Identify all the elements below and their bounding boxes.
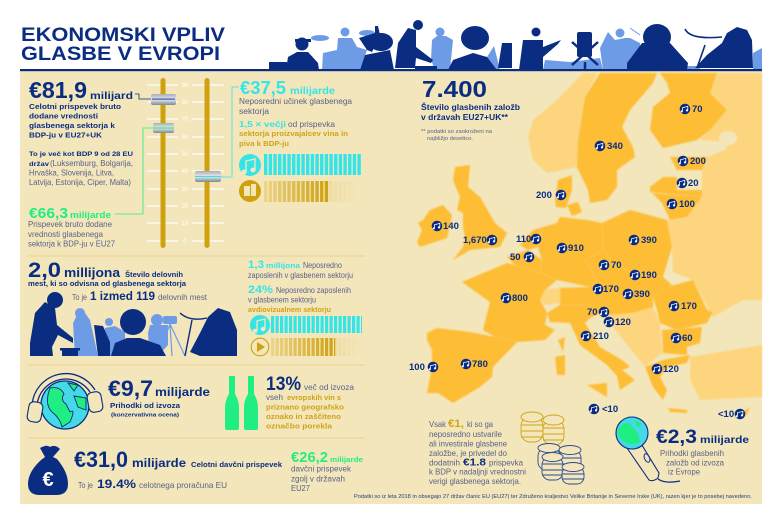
text block: 66,3 billion [28,205,115,248]
text block: 81,9 billion: dodane vrednosti [29,112,98,120]
text block: 31,0 billion tax: 19.4% [97,477,136,491]
panel: GDP sliders: 50 [182,152,189,158]
silhouettes of music workers [30,292,237,356]
text block: 31,0 billion tax: Celotni davčni prispevek [191,460,283,469]
icon: globe with headphones [26,374,104,429]
text block: every euro: neposredno ustvarile [429,430,502,439]
text block: every euro: €1, [448,418,464,430]
text block: 81,9 billion [29,77,133,140]
map markers: 780 [472,359,488,370]
text block: every euro [429,418,526,486]
text block: 2.0 million jobs: 2,0 [28,259,61,282]
text block: 37,5 billion [239,78,353,148]
text block: 7.400 labels: 7.400 [422,76,487,102]
text block: more than GDP of 9 states: Hrvaška, Slovenija, Litva, [29,168,114,178]
icon: microphone globe [616,417,680,482]
text block: every euro: ki so ga [467,420,494,429]
text block: 26,2 billion tax: milijarde [330,455,363,464]
icon: audiovisual play bars [251,338,362,356]
text block: 66,3 billion: vrednosti glasbenega [28,230,104,239]
icon: music bars, direct employment [250,315,362,335]
text block: 81,9 billion: glasbenega sektorja k [29,121,116,130]
map markers [409,104,745,420]
icon: wine and beer bars [239,180,362,202]
text block: 2.0 million jobs: To je [72,293,87,302]
text block: 66,3 billion: sektorja k BDP-ju v EU27 [28,240,115,248]
text block: 81,9 billion: €81,9 [29,77,87,103]
text block: 2,3 billion: Prihodki glasbenih [660,449,724,458]
text block: 1.3 million and 24%: millijona [266,261,301,270]
map markers: 140 [443,221,459,232]
text block: more than GDP of 9 states: (Luksemburg, Bolgarija, [50,159,133,168]
icon: two wine bottles [225,376,258,430]
text block: 9,7 billion exports: (konzervativna ocena) [111,412,179,418]
text block: 37,5 billion: €37,5 [240,78,286,98]
text block: every euro: verigi glasbenega sektorja. [429,477,521,486]
map markers: 800 [512,293,528,304]
text block: 2.0 million jobs: millijona [64,265,121,280]
text block: 2,3 billion: milijarde [700,434,749,446]
text block: 1.3 million and 24% [248,259,353,314]
map markers: 100 [409,362,425,373]
text block: 31,0 billion tax: €31,0 [74,447,128,472]
text block: 13% of wine exports: priznano geografsko [266,404,344,412]
map markers: 110 [516,234,531,245]
panel: GDP sliders: 10 [182,221,189,227]
panel: GDP sliders: 60 [182,135,189,141]
map markers: <10 [718,409,734,420]
text block: 7.400 labels: ** podatki so zaokroženi na [421,129,492,135]
title: GLASBE V EVROPI [21,44,220,65]
text block: 9,7 billion exports [108,376,210,418]
icon: coin stacks [521,412,584,484]
text block: 9,7 billion exports: €9,7 [108,376,153,401]
text block: more than GDP of 9 states: To je več kot BDP 9 od 28 EU [29,151,133,158]
map markers: 120 [663,364,679,375]
text block: 37,5 billion: od prispevka [288,120,336,129]
map markers: 20 [688,178,699,189]
text block: every euro: založbe, je privedel do [429,449,508,458]
text block: 37,5 billion: sektorja [239,107,270,116]
icon: money bag: € [42,469,54,491]
text block: 66,3 billion: €66,3 [29,205,68,222]
map markers: 390 [641,235,657,246]
text block: more than GDP of 9 states: držav [29,161,49,168]
text block: 1.3 million and 24%: Neposredno zaposlenih [276,286,351,295]
text block: 7.400 labels: Število glasbenih založb [421,103,520,112]
text block: every euro: Vsak [429,420,446,429]
text block: 81,9 billion: milijard [90,90,133,102]
map markers: 200 [690,156,706,167]
text block: 26,2 billion tax: EU27 [291,484,310,493]
text block: 2.0 million jobs: mest, ki so odvisna od glasbenega sektorja [28,279,187,288]
icon: music vs music bars [239,154,362,176]
text block: 26,2 billion tax: davčni prispevek [291,464,351,474]
map markers: <10 [602,404,618,415]
map markers: 1,670 [463,235,487,246]
text block: 37,5 billion: sektorja proizvajalcev vina in [239,131,348,138]
text block: 31,0 billion tax: To je [78,481,93,490]
text block: 13% of wine exports: vseh [266,393,283,402]
header rule [20,69,762,71]
text block: 13% of wine exports: 13% [266,374,301,395]
map markers: 210 [593,331,609,342]
map markers: 340 [607,141,623,152]
text block: 66,3 billion: milijarde [70,210,111,220]
text block: 81,9 billion: Celotni prispevek bruto [29,102,121,111]
text block: 13% of wine exports: oznako in zaščiteno [266,414,341,421]
text block: 2.0 million jobs: 1 izmed 119 [90,289,155,303]
text block: 1.3 million and 24%: 1,3 [248,259,264,271]
text block: 26,2 billion tax [291,449,363,493]
panel: map of Europe [417,73,762,416]
map markers: 190 [641,270,657,281]
text block: 26,2 billion tax: €26,2 [291,449,328,466]
title [21,25,225,65]
map markers: 170 [603,284,619,295]
text block: 1.3 million and 24%: zaposlenih v glasbenem sektorju [248,271,353,280]
panel divider lines [28,256,365,438]
text block: 2.0 million jobs [28,259,208,303]
text block: 2,3 billion [656,427,749,476]
text block: 37,5 billion: 1,5 × večji [239,120,286,129]
text block: 1.3 million and 24%: Neposredno [303,261,343,270]
text block: 2.0 million jobs: Število delovnih [125,270,183,279]
text block: 1.3 million and 24%: 24% [248,284,273,296]
panel: GDP sliders: 40 [182,169,189,175]
map markers: 70 [587,307,598,318]
text block: 7.400 labels: v državah EU27+UK** [421,113,509,122]
text block: every euro: €1.8 [463,458,487,468]
text block: 1.3 million and 24%: avdiovizualnem sektorju [248,307,331,314]
text block: 37,5 billion: milijarde [290,86,335,97]
map markers: 60 [682,333,693,344]
panel: GDP sliders: 0 [183,239,187,245]
text block: every euro: dodatnih [429,458,460,468]
panel: GDP sliders: 20 [182,204,189,210]
map markers: 170 [681,301,697,312]
text block: 66,3 billion: Prispevek bruto dodane [28,220,112,229]
map markers: 200 [536,190,552,201]
text block: 26,2 billion tax: zgolj v državah [291,474,345,484]
map markers: 70 [692,104,703,115]
text block: more than GDP of 9 states [29,151,133,187]
text block: 13% of wine exports: evropskih vin s [287,395,341,402]
footer note: Podatki so iz leta 2018 in obsegajo 27 držav članic EU (EU27) ter Združeno kraljestvo Velike Britanije in Severne Irske (UK), razen kjer je to posebej navedeno. [354,494,752,500]
text block: more than GDP of 9 states: Latvija, Estonija, Ciper, Malta) [29,178,131,187]
text block: 37,5 billion: Neposredni učinek glasbenega [239,97,353,106]
text block: 13% of wine exports: označbo porekla [266,424,332,430]
text block: 1.3 million and 24%: v glasbenem sektorju [248,296,316,304]
text block: 31,0 billion tax [74,447,283,491]
text block: every euro: ali investirale glasbene [429,440,507,448]
background panel [20,70,762,504]
panel: GDP sliders: 30 [182,187,189,193]
text block: 9,7 billion exports: Prihodki od izvoza [110,401,181,410]
text block: 2.0 million jobs: delovnih mest [158,293,208,302]
map markers: 120 [615,317,631,328]
text block: 7.400 labels: najbližjo desetico. [427,136,473,142]
text block: 13% of wine exports [266,374,355,430]
text block: every euro: k BDP v nadaljnji vrednostni [429,468,526,476]
text block: 2,3 billion: €2,3 [656,427,697,448]
panel: GDP sliders: 70 [182,117,189,123]
map markers: 100 [679,199,695,210]
map markers: 390 [634,289,650,300]
panel: GDP sliders: 80 [182,100,189,106]
text block: 7.400 labels [421,76,520,142]
text block: 31,0 billion tax: celotnega proračuna EU [139,481,227,490]
text block: 2,3 billion: založb od izvoza [666,458,725,468]
text block: every euro: prispevka [489,458,524,468]
panel: GDP sliders: 90 [182,83,189,89]
map markers: 50 [510,252,521,263]
header silhouettes of musicians [269,20,762,70]
icon: money bag [28,446,68,495]
text block: 13% of wine exports: več od izvoza [304,383,355,392]
panel: GDP sliders [115,78,239,248]
text block: 2,3 billion: iz Evrope [668,468,700,476]
text block: 81,9 billion: BDP-ju v EU27+UK [29,130,103,140]
text block: 31,0 billion tax: milijarde [132,456,186,470]
title: EKONOMSKI VPLIV [21,25,225,46]
map markers: 70 [611,260,622,271]
map markers: 910 [568,243,584,254]
text block: 9,7 billion exports: milijarde [155,385,210,399]
text block: 37,5 billion: piva k BDP-ju [239,141,289,148]
